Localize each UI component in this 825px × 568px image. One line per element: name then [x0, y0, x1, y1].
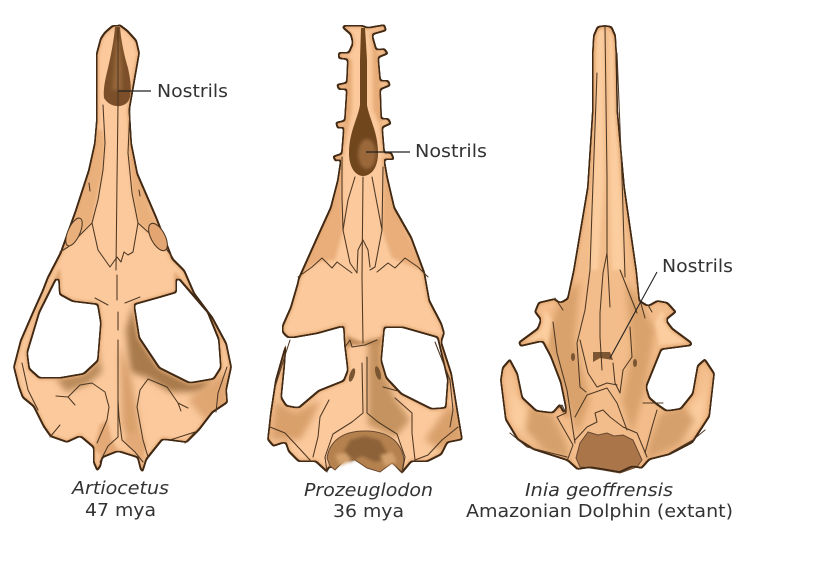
icon: Prozeuglodon nostril opening: [349, 28, 378, 176]
foramen opening: [327, 431, 404, 472]
caption: Prozeuglodon 36 mya: 36 mya: [333, 501, 404, 522]
caption: Inia geoffrensis Amazonian Dolphin (extant): [466, 480, 733, 522]
label: Nostrils (Artiocetus) with leader: Nostrils: [157, 81, 228, 102]
icon: Artiocetus nostril opening: [104, 27, 131, 106]
skull: Prozeuglodon: [267, 24, 462, 474]
foramen opening: [576, 432, 642, 473]
caption: Inia geoffrensis Amazonian Dolphin (extant): Inia geoffrensis: [525, 480, 673, 501]
caption: Artiocetus 47 mya: [71, 478, 169, 521]
caption: Artiocetus 47 mya: Artiocetus: [71, 478, 169, 499]
caption: Prozeuglodon 36 mya: Prozeuglodon: [304, 480, 433, 501]
label: Nostrils (Artiocetus) with leader: [118, 81, 228, 102]
caption: Inia geoffrensis Amazonian Dolphin (extant): Amazonian Dolphin (extant): [466, 501, 733, 522]
skull: Artiocetus: [13, 24, 232, 472]
caption: Prozeuglodon 36 mya: [304, 480, 433, 522]
label: Nostrils (Inia) with leader: [610, 256, 733, 358]
label: Nostrils (Prozeuglodon) with leader: Nostrils: [415, 141, 487, 162]
label: Nostrils (Prozeuglodon) with leader: [366, 141, 487, 162]
label: Nostrils (Inia) with leader: Nostrils: [662, 256, 733, 277]
skull: Inia geoffrensis: [500, 25, 715, 474]
icon: Inia nostril opening: [593, 352, 613, 362]
caption: Artiocetus 47 mya: 47 mya: [85, 500, 156, 521]
